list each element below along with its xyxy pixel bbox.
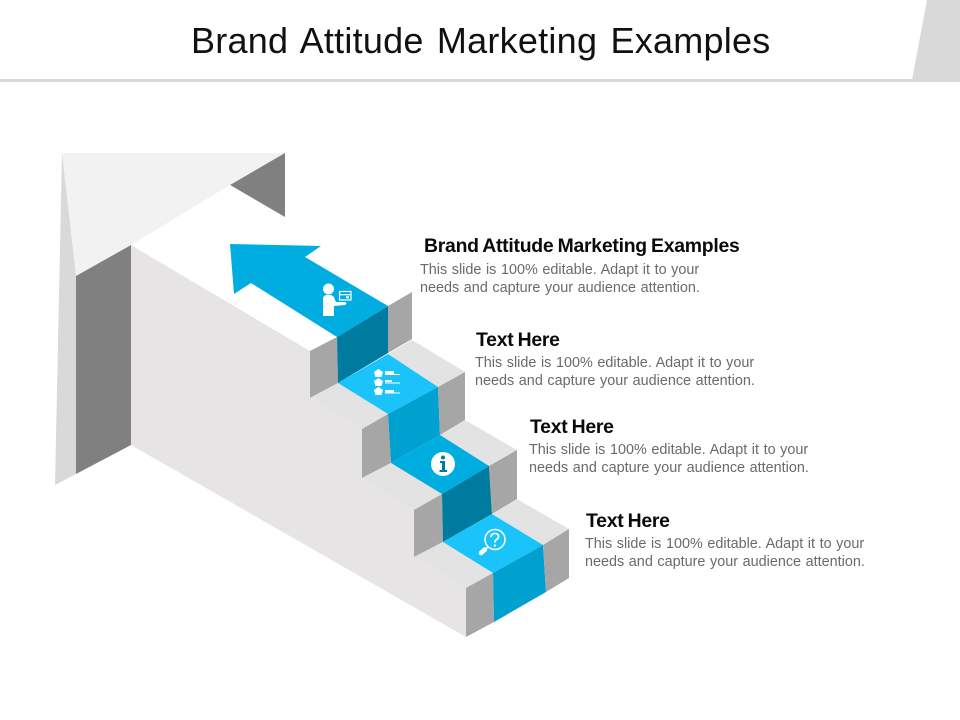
icon: info — [431, 452, 455, 476]
heading 1: Brand Attitude Marketing Examples — [424, 235, 740, 257]
body 3 — [529, 442, 809, 476]
step 1 riser — [310, 292, 412, 398]
header band — [0, 0, 960, 82]
body 1 — [420, 262, 700, 296]
body 4: This slide is 100% editable. Adapt it to your — [585, 536, 864, 552]
text block 4 — [585, 510, 865, 570]
step 3 — [362, 420, 517, 557]
body 2: needs and capture your audience attention. — [475, 373, 755, 389]
body 1: needs and capture your audience attention. — [420, 280, 700, 296]
body 4 — [585, 536, 865, 570]
body 3: needs and capture your audience attention. — [529, 460, 809, 476]
heading 4: Text Here — [586, 510, 670, 532]
icon: person with card — [323, 284, 351, 316]
top landing — [131, 185, 412, 351]
heading 3: Text Here — [530, 416, 614, 438]
body 2: This slide is 100% editable. Adapt it to your — [475, 355, 754, 371]
body 3: This slide is 100% editable. Adapt it to your — [529, 442, 808, 458]
title: Brand Attitude Marketing Examples — [191, 20, 771, 61]
body 4: needs and capture your audience attention. — [585, 554, 865, 570]
staircase side wall — [131, 245, 466, 637]
back arrowhead wing — [55, 153, 285, 485]
heading 2: Text Here — [476, 329, 560, 351]
blue arrow — [230, 244, 388, 337]
text block 2 — [475, 329, 755, 389]
icon: rated list — [374, 369, 400, 395]
body 2 — [475, 355, 755, 389]
step 2 — [310, 340, 465, 478]
step 4 — [414, 499, 569, 637]
body 1: This slide is 100% editable. Adapt it to your — [420, 262, 699, 278]
text block 1 — [420, 235, 740, 296]
text block 3 — [529, 416, 809, 476]
icon: question magnifier — [481, 530, 505, 553]
